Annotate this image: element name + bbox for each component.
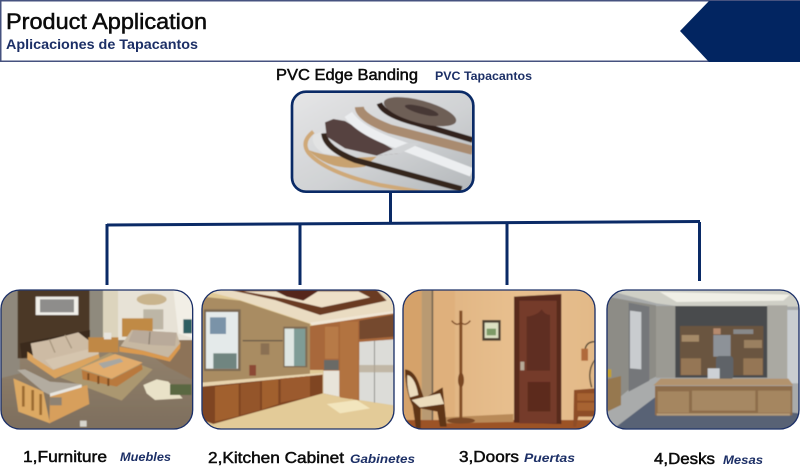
rug [60,353,153,401]
connector lines [107,190,700,285]
subtitle: Aplicaciones de Tapacantos [6,36,198,52]
heading: PVC Tapacantos: PVC Tapacantos [435,69,532,83]
side table and lamp [573,388,595,427]
coffee table [82,364,143,387]
side cabinet [607,376,621,412]
label 4: Desks: 4,Desks [654,451,715,468]
panel 3: doors photo [400,288,597,430]
panel 2: kitchen cabinet photo [200,288,397,430]
label 3 Spanish: Puertas: Puertas [524,451,575,465]
refrigerator [359,339,394,405]
label 2: Kitchen Cabinet: 2,Kitchen Cabinet [208,450,345,467]
header arrow shape [680,1,800,62]
fur rug [143,379,183,400]
chair [405,369,447,428]
carpet [613,397,799,429]
armchair [13,378,50,423]
sofa left [27,352,100,378]
door [514,294,561,424]
panel 4: desks photo [605,288,800,430]
title: Product Application [6,9,207,34]
header banner [1,1,800,62]
label 1 Spanish: Muebles: Muebles [120,450,171,464]
label 2 Spanish: Gabinetes: Gabinetes [350,452,415,466]
counter and base cabinets [202,373,323,387]
label 1: Furniture: 1,Furniture [23,449,107,466]
panel 1: furniture photo [0,288,195,430]
office chair and laptop [716,356,733,379]
label 3: Doors: 3,Doors [459,449,519,466]
upper and tall cabinets [310,313,394,401]
heading: PVC Edge Banding: PVC Edge Banding [276,67,418,84]
coat rack [459,311,462,421]
wall picture [482,320,501,341]
sofa right [119,342,181,362]
bookcase [680,326,763,375]
central photo: edge banding rolls [290,90,477,193]
desk [655,386,792,415]
label 4 Spanish: Mesas: Mesas [723,453,763,467]
